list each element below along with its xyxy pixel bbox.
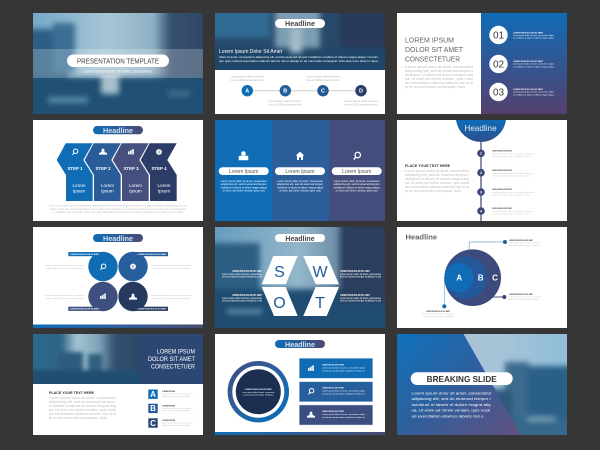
left text: adipiscing elit, sed do eiusmod tempor i	[405, 173, 469, 177]
body text: ncididunt ut labore et dolore magna aliq	[405, 73, 473, 77]
heading	[405, 36, 463, 63]
timeline item text: Lorem ipsum dolor sit amet, consectetur adipiscing	[492, 152, 534, 155]
timeline: B	[283, 89, 287, 95]
bottom strip	[215, 432, 385, 435]
column text: Lorem ipsum dolor sit amet, consectetur	[334, 179, 380, 183]
right captions: Lorem ipsum dolor sit amet, consectetur	[340, 273, 381, 276]
timeline item text: sed do eiusmod tempor incididunt ut labore	[492, 194, 531, 196]
A B C list: sed do eiusmod tempor incididunt	[162, 409, 190, 412]
numbered items: Lorem ipsum dolor sit amet, consectetur adipis	[513, 34, 555, 37]
body text: ip ex ea commodo consequat. Duis	[405, 85, 465, 89]
slide 3: numbered list panel	[397, 13, 567, 114]
intro text: iam quis nostrud exercitation ullamco laboris nisi ut aliquip ex ea commodo consequat. Duis aute irure dolor in repre	[219, 59, 379, 63]
body text: ip ex ea commodo consequat. Duis	[49, 416, 107, 420]
three info boxes: Lorem ipsum dolor sit amet, consectetur adipis	[322, 366, 366, 370]
chevron steps	[57, 143, 177, 201]
left text: ud exercitation ullamco laboris nisi ut al	[405, 185, 469, 189]
column pills: Lorem Ipsum	[229, 169, 258, 175]
slide 2: headline with timeline A to D	[200, 0, 400, 114]
slide 9: nested circles A B C	[397, 227, 567, 328]
heading panel	[140, 334, 203, 384]
column text: adipiscing elit, sed do eiusmod tempor	[334, 182, 380, 186]
chevron steps: Lorem	[101, 183, 114, 188]
nested circles: B	[478, 274, 484, 283]
body text: minim veniam quis nostrud exercitation ullamco laboris nisi ut aliquip ex ea commodo consequat duis aute irure dolor in reprehenderit	[50, 208, 186, 211]
subtitle: Lorem ipsum dolor sit amet, consectetur	[84, 70, 153, 74]
body text: ud exercitation ullamco laboris nisi u	[412, 413, 484, 418]
body text: ua. Ut enim ad minim veniam, quis nostr	[412, 408, 491, 413]
vertical timeline: 1	[480, 152, 482, 156]
left captions: Lorem ipsum dolor sit amet, consectetur	[222, 273, 262, 276]
three info boxes: LOREM IPSUM DOLOR SIT AMET	[322, 386, 344, 390]
A B C list: Lorem ipsum dolor sit amet, consectetur	[162, 422, 193, 424]
body text	[405, 65, 474, 89]
timeline captions: Lore sit 2000 consectetur elit	[344, 104, 378, 106]
timeline: A	[245, 89, 249, 95]
A B C list: C	[150, 419, 156, 428]
right captions: Lorem ipsum dolor sit amet, consectetur	[340, 297, 381, 300]
A B C list: sed do eiusmod tempor incididunt	[162, 424, 190, 427]
slide 7: four circles	[33, 227, 203, 328]
column text: ut enim ad minim veniam quis nost	[336, 188, 378, 192]
chevron steps: STEP 4	[151, 166, 167, 171]
three info boxes: sed do eiusmod tempor incididunt ut labore et	[322, 370, 365, 372]
timeline: D	[359, 89, 363, 95]
vertical timeline: 4	[480, 209, 482, 213]
column text: incididunt ut labore et dolore magna aliqua	[277, 185, 324, 189]
left text: PLACE YOUR TEXT HERE	[405, 164, 451, 168]
column pills: Lorem Ipsum	[285, 169, 315, 175]
numbered items: LOREM IPSUM DOLOR SIT AMET	[513, 88, 544, 91]
side captions: adipiscing elit sed do eiusmod tempor	[46, 297, 84, 300]
slide 12: breaking slide	[382, 319, 582, 450]
column pills	[219, 167, 382, 175]
numbered items: LOREM IPSUM DOLOR SIT AMET	[513, 60, 544, 63]
numbered items: 03	[493, 88, 504, 99]
timeline captions: Lore sit 2000 consectetur elit	[230, 79, 264, 82]
timeline: C	[321, 89, 325, 95]
timeline captions	[230, 76, 378, 106]
column text	[221, 179, 380, 192]
body text: Lorem ipsum dolor sit amet, consectetur adipiscing elit, sed do eiusmod tempor incididunt ut labore et dolore magna aliqua ut enim	[49, 204, 187, 208]
SWOT hexagon: O	[273, 295, 286, 312]
side captions: Lorem ipsum dolor sit amet, consectetur	[151, 294, 191, 297]
left captions: sed do eiusmod tempor incididunt ut lab	[222, 276, 263, 279]
timeline item text: LOREM IPSUM DOLOR SIT AMET	[492, 207, 512, 210]
callout captions: LOREM IPSUM DOLOR SIT AMET	[509, 293, 534, 296]
callout captions: sed do eiusmod tempor incididunt	[423, 315, 453, 318]
column text: incididunt ut labore et dolore magna aliqua	[221, 185, 267, 189]
body text: ncididunt ut labore et dolore magna aliq	[412, 402, 490, 407]
body text: adipiscing elit, sed do eiusmod tempor i	[412, 396, 491, 401]
headline pill	[93, 126, 143, 135]
intro text: dolor sit amet, consectetur adipiscing elit, sed do eiusmod tempor incididunt ut labore et dolore magna aliqua. Ut enim	[219, 55, 378, 59]
headline semicircle	[456, 120, 506, 142]
A B C list: Lorem ipsum dolor sit amet, consectetur	[162, 392, 193, 396]
left text: ua. Ut enim ad minim veniam, quis nostr	[405, 181, 470, 185]
timeline item text: LOREM IPSUM DOLOR SIT AMET	[492, 150, 512, 152]
body text	[49, 391, 117, 420]
SWOT hexagon: S	[274, 264, 285, 281]
body text: adipiscing elit, sed do eiusmod tempor i	[405, 69, 473, 73]
body text: Lorem ipsum dolor sit amet, consectetur	[405, 65, 474, 69]
body text: ua. Ut enim ad minim veniam, quis nostr	[49, 408, 117, 412]
connector lines and dots	[442, 240, 507, 308]
three info boxes: Lorem ipsum dolor sit amet, consectetur adipis	[322, 390, 366, 392]
numbered items: LOREM IPSUM DOLOR SIT AMET	[513, 31, 544, 34]
right captions: sed do eiusmod tempor incididunt ut lab	[340, 276, 382, 279]
A B C list: B	[150, 404, 156, 413]
numbered items: Lorem ipsum dolor sit amet, consectetur adipis	[513, 63, 555, 66]
timeline	[242, 85, 367, 96]
heading panel: LOREM IPSUM	[157, 350, 195, 356]
A B C list	[148, 390, 193, 428]
headline: Headline	[406, 232, 437, 242]
callout captions: Lorem ipsum dolor sit amet, consectetur	[509, 296, 542, 298]
left captions: LOREM IPSUM DOLOR SIT AMET	[232, 270, 262, 273]
A B C list: A	[150, 390, 156, 399]
callout captions: Lorem ipsum dolor sit amet, consectetur	[422, 312, 455, 316]
body text: Lorem ipsum dolor sit amet, consectetur	[412, 390, 492, 396]
bottom strip	[33, 324, 203, 328]
SWOT hexagon	[262, 256, 339, 316]
numbered items: Lorem ipsum dolor sit amet, consectetur adipis	[513, 91, 555, 94]
slide 1: presentation template cover	[18, 0, 218, 129]
numbered items	[489, 26, 555, 101]
heading panel: DOLOR SIT AMET	[148, 357, 195, 363]
column pills: Lorem Ipsum	[342, 169, 371, 175]
vertical timeline	[477, 142, 485, 221]
A B C list: LOREM IPSUM	[162, 405, 175, 407]
timeline item text: LOREM IPSUM DOLOR SIT AMET	[492, 169, 512, 172]
heading panel: CONSECTETUER	[151, 364, 196, 370]
left captions	[222, 270, 263, 303]
numbered items: 01	[493, 31, 504, 42]
left text: ncididunt ut labore et dolore magna aliq	[405, 177, 469, 181]
left captions: sed do eiusmod tempor incididunt ut lab	[222, 300, 263, 303]
vertical timeline: 3	[480, 190, 482, 194]
body text: in voluptate velit esse cillum dolore eu fugiat nulla pariatur excepteur sint occaecat cupidatat non proident sunt in culpa	[53, 211, 184, 214]
nested circles	[444, 249, 501, 306]
pill: BREAKING SLIDE	[427, 375, 497, 384]
column text: incididunt ut labore et dolore magna aliqua	[334, 185, 380, 189]
side captions: Lorem ipsum dolor sit amet, consectetur	[45, 294, 85, 297]
timeline item text: LOREM IPSUM DOLOR SIT AMET	[492, 188, 512, 191]
timeline item text: Lorem ipsum dolor sit amet, consectetur adipiscing	[492, 210, 534, 213]
timeline captions: Lore sit 2000 consectetur elit	[306, 79, 340, 82]
left text	[405, 164, 470, 193]
right captions	[340, 270, 382, 303]
side captions: adipiscing elit sed do eiusmod tempor	[152, 297, 190, 300]
three info boxes: LOREM IPSUM DOLOR SIT AMET	[322, 364, 344, 366]
headline semicircle: Headline	[464, 124, 497, 133]
column text: ut enim ad minim veniam quis nost	[223, 188, 265, 192]
chevron steps: Lorem	[157, 183, 171, 188]
chevron steps: Lorem	[72, 183, 86, 188]
body text: ncididunt ut labore et dolore magna aliq	[49, 404, 116, 408]
callout captions: LOREM IPSUM DOLOR SIT AMET	[426, 310, 451, 313]
three info boxes	[299, 358, 373, 425]
title band	[33, 49, 203, 78]
chevron steps: STEP 3	[123, 166, 139, 171]
title pill	[67, 54, 169, 67]
chevron steps: Lorem	[129, 183, 142, 188]
numbered items: ut incididunt ut labore et dolore magna aliqua	[513, 93, 555, 96]
right captions: sed do eiusmod tempor incididunt ut lab	[340, 300, 382, 303]
slide 6: vertical numbered timeline	[397, 120, 567, 221]
nested circles: A	[456, 274, 462, 283]
column text: Lorem ipsum dolor sit amet, consectetur	[221, 179, 267, 183]
numbered items: ut incididunt ut labore et dolore magna aliqua	[513, 65, 555, 68]
headline pill	[275, 340, 325, 349]
left captions: Lorem ipsum dolor sit amet, consectetur	[222, 297, 262, 300]
callout captions: LOREM IPSUM DOLOR SIT AMET	[509, 239, 534, 242]
body text	[412, 390, 492, 418]
three info boxes: sed do eiusmod tempor incididunt ut labore et	[322, 416, 365, 419]
side captions: Lorem ipsum dolor sit amet, consectetur	[45, 264, 85, 267]
timeline item text	[492, 150, 534, 216]
timeline item text: sed do eiusmod tempor incididunt ut labore	[492, 174, 531, 178]
callout captions	[422, 239, 542, 318]
headline pill: Headline	[103, 234, 133, 243]
intro text: Lorem Ipsum Dolor Sit Amet	[219, 49, 282, 55]
SWOT hexagon: W	[312, 264, 328, 281]
circle cluster: LOREM IPSUM DOLOR SIT AMET	[138, 253, 167, 256]
circle cluster	[68, 252, 168, 311]
right captions: LOREM IPSUM DOLOR SIT AMET	[340, 270, 370, 273]
chevron steps: STEP 1	[67, 166, 83, 171]
timeline captions: Lorem ipsum dolor sit amet	[268, 100, 302, 103]
slide 4: four step chevrons	[33, 120, 203, 221]
chevron steps: Ipsum	[101, 188, 114, 194]
nested circles: C	[492, 274, 498, 283]
left captions: LOREM IPSUM DOLOR SIT AMET	[232, 294, 262, 297]
three info boxes: Lorem ipsum dolor sit amet, consectetur adipis	[322, 413, 366, 416]
side captions	[45, 264, 191, 300]
ring chart: Lorem ipsum dolor sit amet, consectetur	[242, 391, 275, 394]
side captions: adipiscing elit sed do eiusmod tempor	[152, 267, 190, 270]
column text: adipiscing elit, sed do eiusmod tempor	[221, 182, 267, 186]
A B C list: LOREM IPSUM	[162, 420, 175, 422]
chevron steps: Ipsum	[129, 188, 142, 194]
timeline item text: Lorem ipsum dolor sit amet, consectetur adipiscing	[492, 191, 534, 194]
column text: ut enim ad minim veniam quis nost	[279, 188, 321, 192]
timeline captions: Lore sit 2000 consectetur elit	[268, 104, 302, 106]
A B C list: sed do eiusmod tempor incididunt	[162, 395, 190, 398]
column text: adipiscing elit, sed do eiusmod tempor	[277, 182, 323, 186]
body text	[49, 204, 187, 214]
callout captions: Lorem ipsum dolor sit amet, consectetur	[509, 242, 542, 244]
column text: Lorem ipsum dolor sit amet, consectetur	[277, 179, 323, 183]
headline pill: Headline	[285, 340, 315, 349]
headline pill: Headline	[103, 126, 133, 135]
column icons	[239, 151, 360, 160]
timeline captions: Lorem ipsum dolor sit amet	[344, 100, 378, 103]
three info boxes: sed do eiusmod tempor incididunt ut labore et	[322, 392, 365, 396]
circle cluster: LOREM IPSUM DOLOR SIT AMET	[70, 253, 100, 256]
three info boxes: LOREM IPSUM DOLOR SIT AMET	[322, 410, 344, 413]
heading: LOREM IPSUM	[405, 36, 454, 44]
slide 10: photo header with A B C list	[23, 324, 203, 435]
SWOT hexagon: T	[315, 295, 325, 312]
timeline item text: Lorem ipsum dolor sit amet, consectetur adipiscing	[492, 172, 534, 175]
side captions: adipiscing elit sed do eiusmod tempor	[46, 267, 84, 270]
ring chart: LOREM IPSUM DOLOR SIT AMET	[245, 388, 272, 391]
ring chart	[228, 361, 289, 422]
ring chart: sed do eiusmod tempor incididunt	[243, 394, 274, 397]
A B C list: LOREM IPSUM	[162, 391, 175, 393]
side captions: Lorem ipsum dolor sit amet, consectetur	[151, 264, 191, 267]
numbered items: ut incididunt ut labore et dolore magna aliqua	[513, 37, 555, 40]
headline pill	[275, 234, 325, 243]
right captions: LOREM IPSUM DOLOR SIT AMET	[340, 294, 370, 297]
heading: CONSECTETUER	[405, 54, 460, 63]
body text: PLACE YOUR TEXT HERE	[49, 391, 95, 395]
body text: ua. Ut enim ad minim veniam, quis nostr	[405, 77, 474, 81]
heading: DOLOR SIT AMET	[405, 45, 463, 54]
timeline item text: sed do eiusmod tempor incididunt ut labore	[492, 155, 531, 158]
chevron steps: Ipsum	[73, 188, 85, 194]
headline pill: Headline	[285, 19, 315, 28]
timeline item text: sed do eiusmod tempor incididunt ut labore	[492, 212, 531, 216]
chevron steps: STEP 2	[95, 166, 111, 171]
body text: ud exercitation ullamco laboris nisi ut al	[49, 412, 116, 416]
callout captions: sed do eiusmod tempor incididunt	[509, 244, 539, 247]
pill	[411, 372, 513, 385]
body text: ud exercitation ullamco laboris nisi ut al	[405, 81, 473, 85]
numbered items: 02	[493, 60, 504, 71]
vertical timeline: 2	[480, 171, 482, 175]
circle cluster: LOREM IPSUM DOLOR SIT AMET	[70, 308, 100, 310]
timeline captions: Lorem ipsum dolor sit amet	[230, 76, 264, 78]
slide 5: three columns	[215, 120, 385, 221]
circle cluster: LOREM IPSUM DOLOR SIT AMET	[138, 308, 167, 310]
intro text	[219, 49, 379, 63]
callout captions: sed do eiusmod tempor incididunt	[509, 298, 539, 301]
timeline captions: Lorem ipsum dolor sit amet	[306, 76, 340, 78]
title pill: PRESENTATION TEMPLATE	[77, 58, 159, 65]
slide 11: ring with three boxes	[215, 334, 385, 435]
slide 8: SWOT	[200, 212, 400, 343]
chevron steps: Ipsum	[158, 188, 170, 194]
left text: Lorem ipsum dolor sit amet, consectetur	[405, 169, 470, 173]
left text: ip ex ea commodo consequat. Duis	[405, 189, 461, 193]
body text: Lorem ipsum dolor sit amet, consectetur	[49, 396, 117, 400]
headline pill	[93, 234, 143, 243]
gradient triangle panel	[397, 334, 521, 435]
headline pill	[275, 19, 325, 28]
body text: adipiscing elit, sed do eiusmod tempor i	[49, 400, 116, 404]
A B C list: Lorem ipsum dolor sit amet, consectetur	[162, 407, 193, 410]
headline pill: Headline	[285, 236, 315, 243]
